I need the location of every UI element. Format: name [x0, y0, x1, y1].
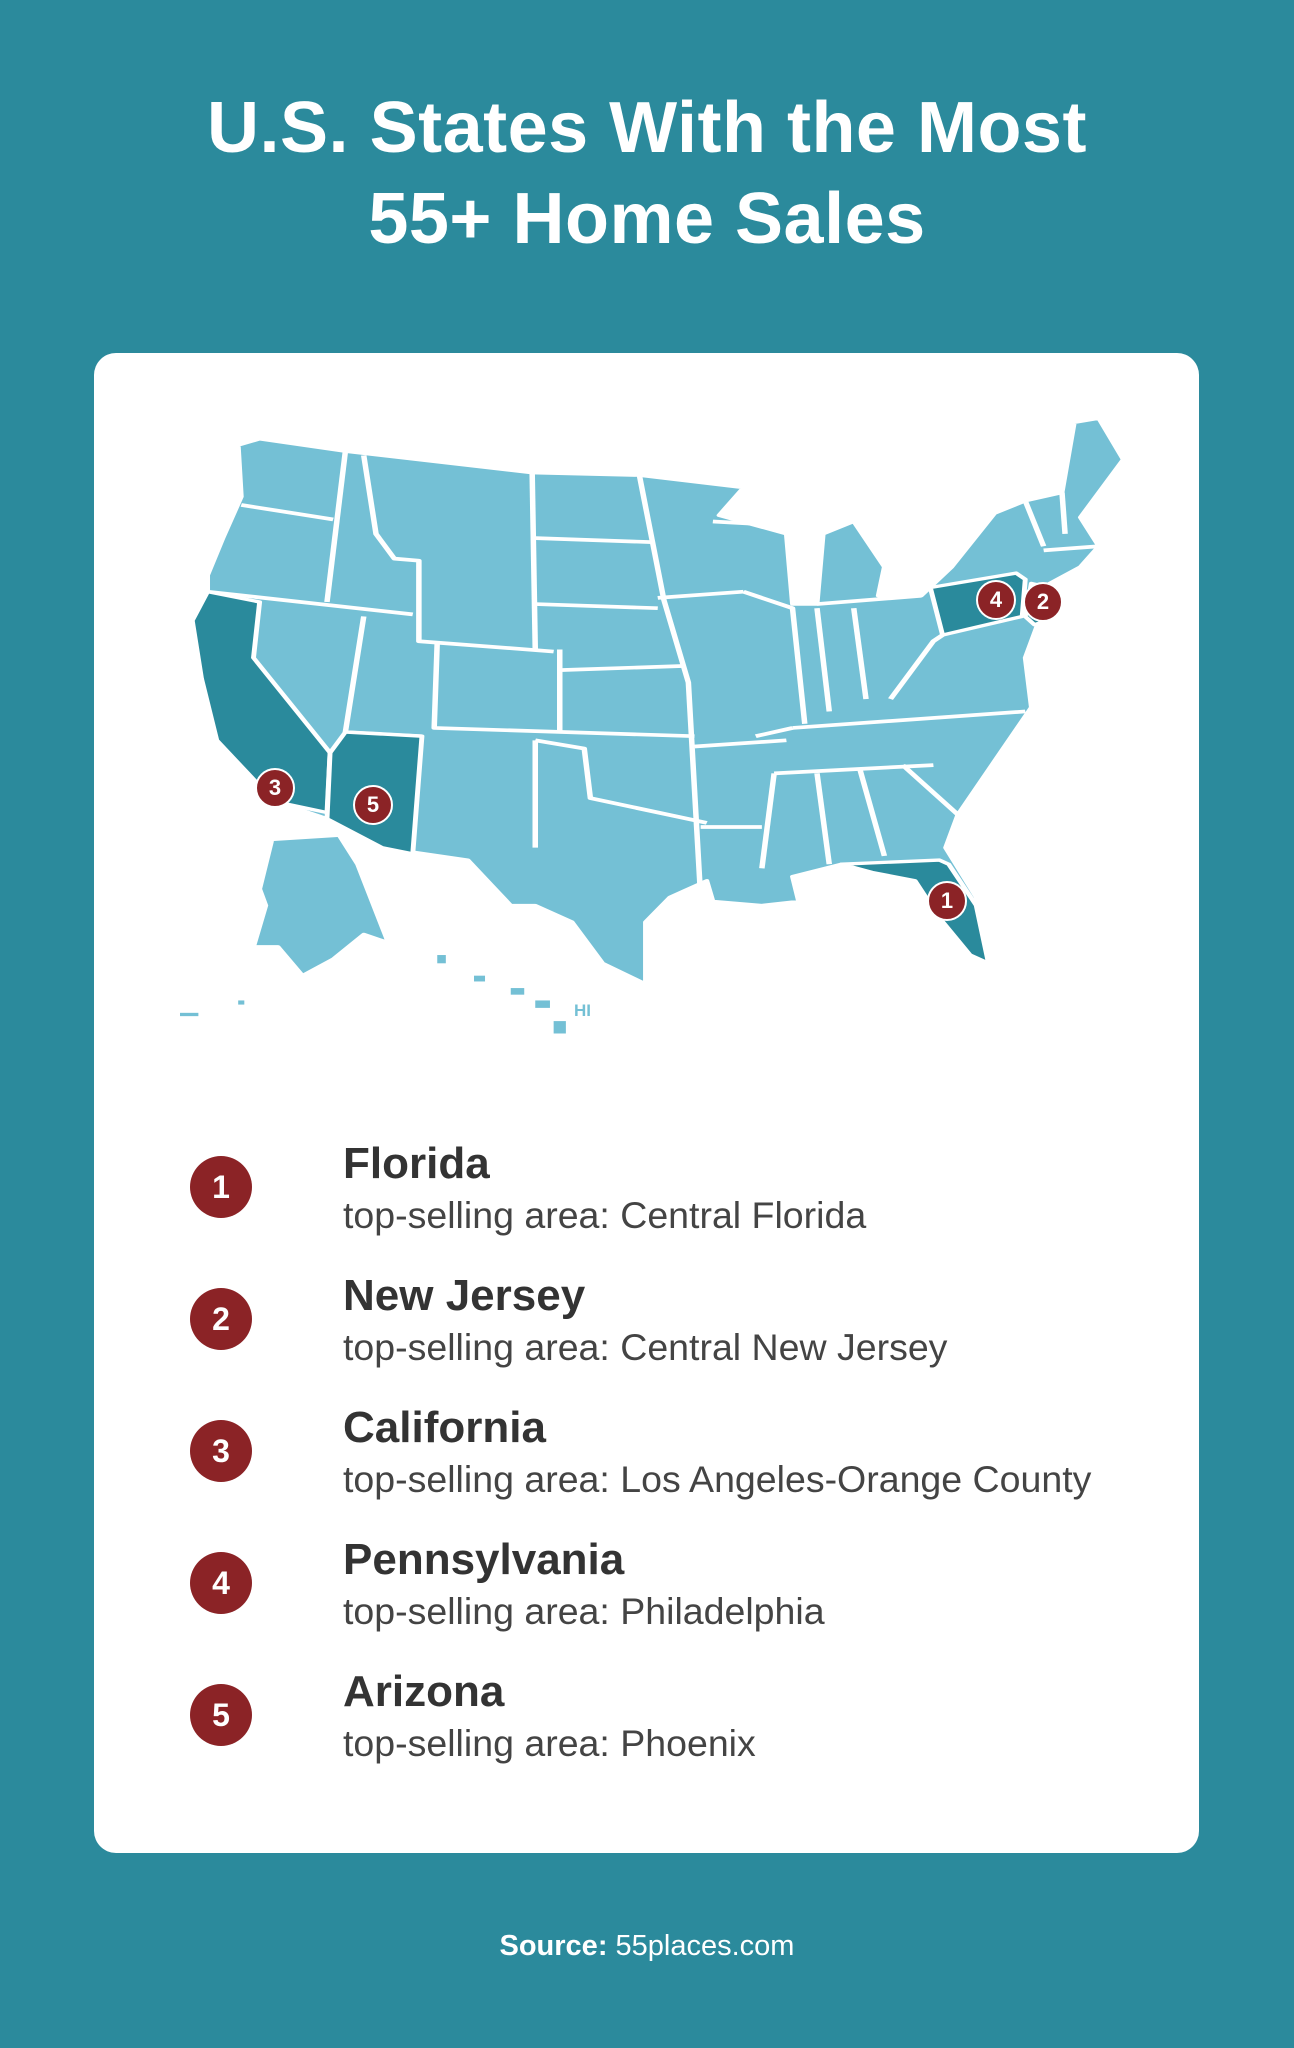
list item 1	[190, 1139, 866, 1236]
list item 4: 4	[212, 1565, 230, 1601]
source: Source: 55places.com	[500, 1930, 794, 1962]
marker 4: 4	[990, 587, 1002, 612]
list item 2: 2	[212, 1301, 230, 1337]
marker 4	[976, 580, 1016, 620]
list item 4: top-selling area: Philadelphia	[343, 1590, 825, 1632]
map	[180, 420, 1120, 1034]
list item 5: top-selling area: Phoenix	[343, 1722, 756, 1764]
title	[207, 88, 1087, 259]
list item 5: Arizona	[343, 1667, 504, 1716]
marker 2	[1023, 582, 1063, 622]
list item 2: top-selling area: Central New Jersey	[343, 1326, 947, 1368]
list item 3	[190, 1403, 1092, 1500]
title: U.S. States With the Most	[207, 88, 1087, 168]
list item 3: 3	[212, 1433, 230, 1469]
list item 1: 1	[212, 1169, 230, 1205]
list item 3: top-selling area: Los Angeles-Orange County	[343, 1458, 1091, 1500]
list item 5	[190, 1667, 756, 1764]
marker 2: 2	[1037, 589, 1049, 614]
marker 1	[927, 881, 967, 921]
marker 5	[353, 785, 393, 825]
list item 2: New Jersey	[343, 1271, 585, 1320]
list item 1: Florida	[343, 1139, 490, 1188]
title: 55+ Home Sales	[368, 179, 926, 259]
list item 4	[190, 1535, 825, 1632]
label: HI: HI	[574, 1001, 591, 1020]
list item 4: Pennsylvania	[343, 1535, 624, 1584]
list item 1: top-selling area: Central Florida	[343, 1194, 866, 1236]
marker 3	[255, 768, 295, 808]
list item 3: California	[343, 1403, 546, 1452]
panel: card	[94, 353, 1199, 1853]
marker 1: 1	[941, 888, 953, 913]
list item 2	[190, 1271, 948, 1368]
marker 5: 5	[367, 792, 379, 817]
highlighted states	[192, 573, 1050, 963]
list item 5: 5	[212, 1697, 230, 1733]
marker 3: 3	[269, 775, 281, 800]
